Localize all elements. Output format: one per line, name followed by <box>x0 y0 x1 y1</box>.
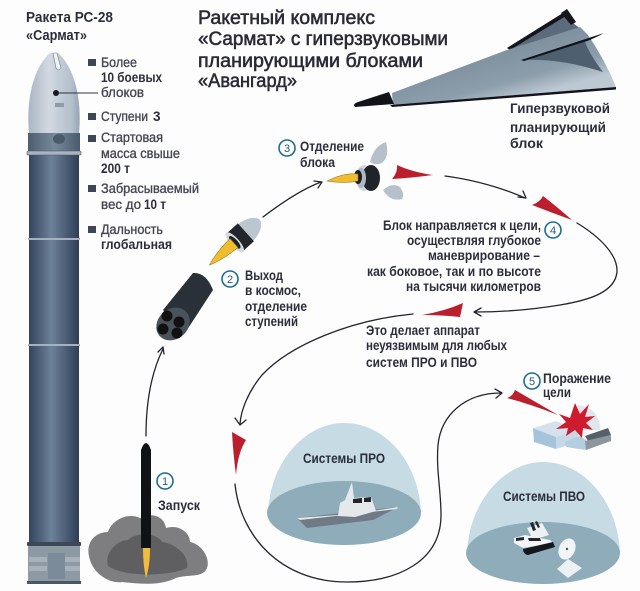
glide vehicle label: планирующий <box>510 120 606 135</box>
rocket specifications list: 10 боевых <box>101 70 162 85</box>
second stage with warhead <box>201 210 269 275</box>
rocket specifications list: 10 т <box>144 197 166 212</box>
rocket specifications list: 200 т <box>101 161 130 176</box>
step 4 label <box>367 218 561 294</box>
step 2 label: в космос, <box>245 283 301 298</box>
heading: PVO: Системы ПВО <box>503 489 585 504</box>
red glider 5 <box>507 390 558 415</box>
arrow: toward second glider <box>445 176 526 198</box>
invulnerability note <box>366 323 507 370</box>
booster stage <box>150 273 213 347</box>
step 4 label: осуществляя глубокое <box>407 233 541 248</box>
launch rocket <box>141 443 151 578</box>
step 4 label: Блок направляется к цели, <box>383 218 541 233</box>
arrow: manoeuvre curve <box>474 223 617 316</box>
step 3 label: блока <box>300 155 335 170</box>
step 2 label: Выход <box>245 268 283 283</box>
rocket specifications list: 3 <box>153 109 161 124</box>
step 2 label <box>222 268 307 329</box>
arrow: stage two to three <box>263 181 322 217</box>
step 1 label: Запуск <box>158 498 200 513</box>
rocket heading: «Сармат» <box>26 28 87 44</box>
step 3 label: Отделение <box>300 139 364 154</box>
hypersonic glide vehicle <box>354 9 616 107</box>
step 4 label: 4 <box>550 225 556 237</box>
step 1 label: 1 <box>162 476 168 488</box>
rocket specifications list: Забрасываемый <box>101 181 199 196</box>
step 3 label <box>279 139 364 170</box>
rocket RS-28 <box>27 53 98 584</box>
red glider 3 <box>422 303 463 317</box>
dome: air defence systems <box>466 462 620 584</box>
title <box>198 7 448 92</box>
step 4 label: как боковое, так и по высоте <box>367 264 541 279</box>
title: планирующими блоками <box>198 50 423 72</box>
red glider 4 <box>232 432 246 475</box>
rocket specifications list <box>88 55 199 252</box>
rocket specifications list: глобальная <box>101 237 172 252</box>
invulnerability note: систем ПРО и ПВО <box>366 355 477 370</box>
heading: PRO: Системы ПРО <box>303 451 385 466</box>
dome: missile defence systems <box>267 423 421 545</box>
rocket specifications list: Ступени <box>101 109 148 124</box>
rocket specifications list: Стартовая <box>101 130 163 145</box>
arrow: long curve to third glider <box>235 314 413 425</box>
icon: warship <box>297 482 398 528</box>
step 1 label <box>157 473 200 513</box>
title: «Сармат» с гиперзвуковыми <box>198 28 448 50</box>
step 4 label: маневрирование – <box>428 248 540 263</box>
glide vehicle label: Гиперзвуковой <box>510 101 610 116</box>
rocket specifications list: Дальность <box>101 222 163 237</box>
rocket specifications list: вес до <box>101 197 141 212</box>
red glider 1 <box>392 165 433 179</box>
step 5 label: 5 <box>529 376 535 388</box>
invulnerability note: Это делает аппарат <box>366 323 480 338</box>
step 5 label <box>524 371 611 400</box>
step 2 label: 2 <box>227 274 233 286</box>
title: «Авангард» <box>198 70 297 92</box>
glide vehicle label <box>510 101 610 151</box>
icon: missile launcher vehicle <box>514 521 555 555</box>
step 4 label: на тысячи километров <box>406 279 541 294</box>
rocket specifications list: масса свыше <box>101 146 180 161</box>
icon: launch smoke <box>88 515 208 584</box>
invulnerability note: неуязвимым для любых <box>366 338 507 353</box>
step 2 label: ступений <box>245 314 298 329</box>
arrow: launch to stage separation <box>146 347 164 436</box>
step 2 label: отделение <box>245 299 307 314</box>
glide vehicle label: блок <box>510 136 543 151</box>
icon: radar dish <box>555 536 582 578</box>
step 5 label: цели <box>543 385 571 400</box>
arrow: curve around defence domes <box>235 389 502 582</box>
rocket heading: Ракета РС-28 <box>26 10 113 26</box>
step 3 label: 3 <box>284 143 290 155</box>
title: Ракетный комплекс <box>198 7 375 29</box>
rocket heading <box>26 10 113 44</box>
step 5 label: Поражение <box>543 371 611 386</box>
target building with explosion <box>533 403 611 450</box>
red glider 2 <box>532 196 572 220</box>
rocket specifications list: блоков <box>101 85 144 100</box>
step 3 separation <box>327 142 403 200</box>
rocket specifications list: Более <box>101 55 137 70</box>
